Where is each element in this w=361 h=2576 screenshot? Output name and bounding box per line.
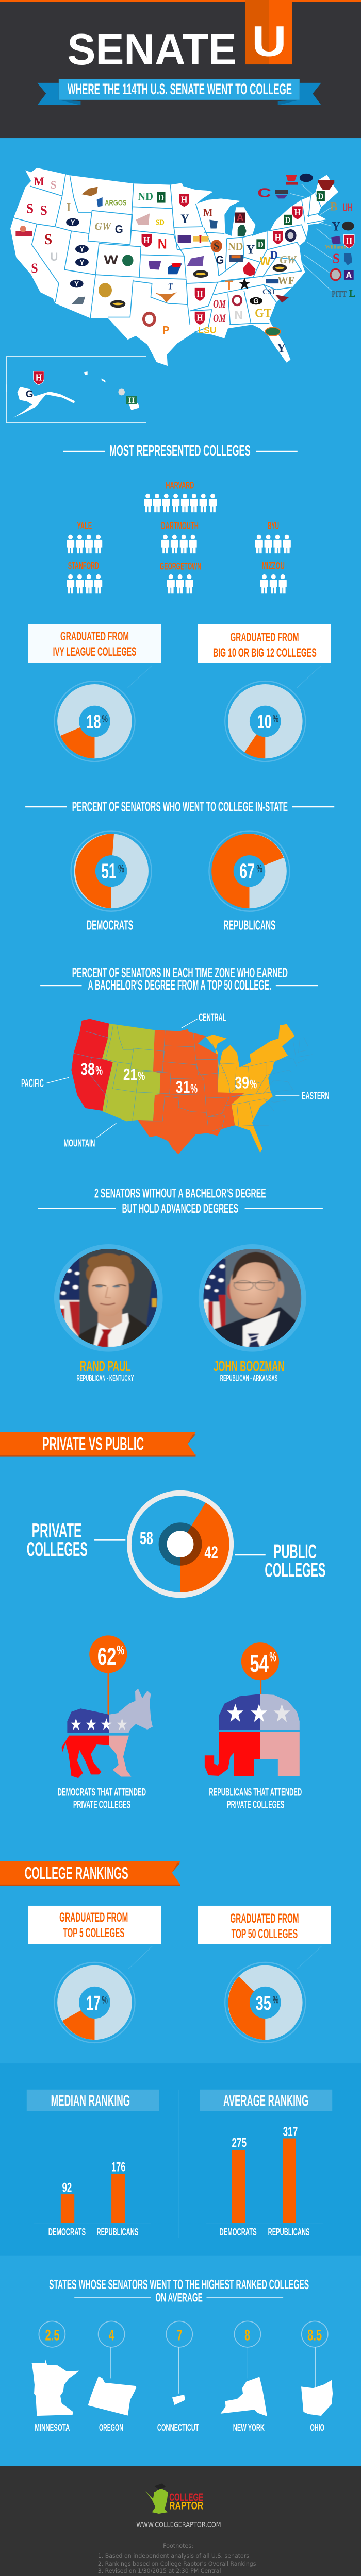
college logos: T (225, 277, 233, 293)
college logos: Y (246, 243, 255, 257)
college logos: H (196, 313, 203, 323)
map: time zones: % (250, 1077, 257, 1091)
donut chart: Democrats 51 percent: 51 (101, 860, 116, 883)
portrait: John Boozman (199, 1244, 306, 1352)
college logos: N (158, 236, 167, 252)
college logos: H (346, 236, 352, 246)
people counts: HARVARD (166, 480, 194, 491)
section: header (0, 0, 361, 392)
label: public colleges: PUBLIC (273, 1540, 317, 1563)
college logos: UH (342, 201, 353, 214)
people counts: MIZZOU (262, 560, 285, 571)
inset: Alaska and Hawaii (7, 357, 146, 392)
donut chart: Republicans 67 percent: % (256, 862, 262, 875)
college logos: OM (213, 297, 226, 310)
college logos: Y (332, 219, 341, 234)
icon: Democratic donkey 62 percent: DEMOCRATS THAT ATTENDED (58, 1786, 146, 1799)
icon: orange U block (245, 0, 292, 64)
labels: time zones: PACIFIC (21, 1077, 44, 1090)
donut chart: 10 percent: % (273, 713, 278, 725)
college logos: G (253, 296, 259, 305)
donut chart: 17 percent: % (102, 1994, 108, 2006)
college logos: WF (277, 274, 294, 287)
map: time zones: 31 (176, 1077, 190, 1096)
ribbon with subtitle (37, 79, 321, 105)
icon: Republican elephant 54 percent: % (269, 1650, 276, 1664)
state: New York (221, 2321, 267, 2433)
state: Connecticut (157, 2321, 199, 2433)
name: John Boozman (214, 1358, 284, 1382)
heading: ON AVERAGE (155, 2291, 203, 2304)
portrait: Rand Paul (54, 1244, 163, 1352)
donut chart: 10 percent (225, 681, 305, 761)
college logos: Williams (325, 245, 346, 250)
labels: time zones: CENTRAL (199, 1012, 226, 1024)
state: Minnesota (32, 2321, 79, 2433)
bar chart: average ranking: DEMOCRATS (219, 2226, 257, 2238)
icon: Republican elephant 54 percent (205, 1642, 302, 1811)
college logos: S (31, 261, 38, 276)
heading (49, 2277, 309, 2304)
college logos: S (26, 201, 34, 216)
state: Oregon: 4 (109, 2327, 114, 2344)
state: Ohio: OHIO (310, 2422, 324, 2433)
state: Minnesota: MINNESOTA (35, 2422, 70, 2433)
college logos: H (143, 235, 150, 245)
icon: Democratic donkey 62 percent (58, 1635, 153, 1811)
college logos: H (196, 289, 203, 299)
icon: Democratic donkey 62 percent: 62 (97, 1643, 116, 1670)
footnotes (98, 2542, 256, 2574)
icon: Republican elephant 54 percent: 54 (250, 1650, 269, 1677)
college logos: T (168, 281, 173, 291)
state: Oregon: OREGON (99, 2422, 123, 2433)
college logos: B (330, 200, 338, 213)
section: most represented colleges (7, 384, 331, 761)
logo: College Raptor: COLLEGE (169, 2490, 203, 2503)
name: Rand Paul (77, 1358, 134, 1382)
zone: Mountain (101, 1024, 160, 1121)
callout: Ivy League (28, 624, 161, 663)
donut chart: Republicans 67 percent: REPUBLICANS (223, 918, 275, 933)
icon: Democratic donkey 62 percent: PRIVATE COLLEGES (73, 1799, 130, 1811)
zone: Central (138, 1029, 244, 1154)
icon: Democratic donkey 62 percent: % (117, 1643, 124, 1657)
college logos (15, 174, 355, 385)
banner (0, 1432, 195, 1457)
map: time zones: % (95, 1064, 103, 1077)
college logos: C (257, 186, 271, 200)
state: New York: NEW YORK (233, 2422, 265, 2433)
people counts: GEORGETOWN (160, 561, 201, 572)
inset frame bottom with Alaska and Hawaii (7, 384, 146, 423)
map: US states with college logos (10, 168, 355, 385)
heading: MOST REPRESENTED COLLEGES (109, 443, 251, 460)
college logos: D (158, 194, 164, 202)
donut chart: Democrats 51 percent (71, 831, 152, 933)
labels: time zones (21, 1012, 329, 1149)
donut chart: Republicans 67 percent (209, 831, 290, 933)
state: Minnesota: 2.5 (45, 2327, 60, 2344)
people counts: STANFORD (68, 560, 99, 571)
section: college rankings (0, 1861, 361, 2246)
section: senators without bachelor's degree: REPUBLICAN - KENTUCKY (77, 1374, 134, 1382)
college logos: ND (228, 240, 243, 253)
footnotes: 2. Rankings based on College Raptor's Overall Rankings (98, 2560, 256, 2567)
college logos: I (67, 200, 71, 214)
college logos: ND (138, 190, 153, 203)
footnotes: 1. Based on independent analysis of all U.S. senators (98, 2553, 249, 2560)
callout: top 5 (28, 1906, 161, 1944)
college logos: W (260, 254, 271, 268)
people counts: DARTMOUTH (161, 520, 199, 532)
bar chart: median ranking (27, 2090, 159, 2238)
heading (38, 1186, 323, 1216)
label: private colleges: PRIVATE (32, 1519, 81, 1541)
college logos: H (275, 232, 281, 242)
state: Ohio (301, 2321, 333, 2433)
college logos: D (270, 248, 278, 261)
donut chart: private vs public (129, 1493, 232, 1595)
bar chart: median ranking: MEDIAN RANKING (51, 2092, 130, 2110)
college logos: H (36, 372, 42, 383)
callout: Ivy League: GRADUATED FROM (60, 630, 129, 643)
college logos: GT (255, 307, 272, 320)
bar chart: average ranking: REPUBLICANS (268, 2226, 309, 2238)
college logos: H (181, 195, 187, 205)
donut chart: 18 percent: % (102, 713, 108, 725)
bar chart: average ranking: 317 (283, 2125, 298, 2139)
people counts (67, 480, 291, 593)
section: senators without bachelor's degree: REPUBLICAN - ARKANSAS (220, 1374, 277, 1382)
callout: Ivy League: IVY LEAGUE COLLEGES (53, 645, 136, 659)
college logos: U (50, 250, 58, 263)
college logos: CSJ (262, 289, 275, 296)
callout: top 5: TOP 5 COLLEGES (63, 1926, 125, 1940)
college logos: SD (156, 219, 165, 227)
bar chart: median ranking: DEMOCRATS (48, 2226, 86, 2238)
banner: PRIVATE VS PUBLIC (42, 1433, 144, 1454)
college logos: L (349, 288, 355, 299)
college logos: PITT (332, 290, 347, 299)
label: private colleges: COLLEGES (27, 1537, 88, 1560)
college logos: P (162, 324, 169, 337)
callout: top 50: TOP 50 COLLEGES (232, 1927, 298, 1941)
title: U: U (252, 17, 286, 65)
college logos: A (237, 212, 243, 224)
bar chart: average ranking (200, 2090, 332, 2238)
logo: College Raptor: RAPTOR (169, 2499, 203, 2512)
section: senators without bachelor's degree: RAND PAUL (80, 1358, 131, 1375)
donut chart: 35 percent: % (273, 1994, 278, 2006)
donut chart: 10 percent: 10 (257, 710, 272, 733)
inset frame bottom with Alaska and Hawaii: H (128, 396, 135, 405)
college logos: M (34, 175, 44, 188)
donut chart: 18 percent: 18 (86, 710, 101, 733)
college logos: S (44, 231, 52, 248)
map: time zones: 39 (235, 1073, 249, 1092)
logo: College Raptor (145, 2483, 203, 2514)
map: time zones: % (138, 1069, 145, 1083)
footnotes: Footnotes: (163, 2542, 193, 2549)
bar chart: median ranking: REPUBLICANS (97, 2226, 138, 2238)
college logos: Y (74, 279, 79, 288)
labels: time zones: EASTERN (302, 1091, 329, 1102)
people counts: BYU (268, 520, 279, 532)
map: time zones: % (190, 1082, 198, 1095)
title: SENATE: SENATE (67, 25, 237, 74)
donut chart: private vs public: 42 (204, 1543, 218, 1563)
donut chart: 35 percent (225, 1962, 305, 2043)
banner: COLLEGE RANKINGS (25, 1863, 128, 1883)
college logos: GW (280, 254, 297, 266)
bar chart: average ranking: 275 (232, 2136, 247, 2150)
callout: top 50: GRADUATED FROM (230, 1911, 299, 1926)
college logos: S (214, 241, 219, 252)
college logos: D (318, 192, 323, 201)
college logos: G (216, 253, 224, 266)
banner (0, 1861, 180, 1886)
state: Connecticut: 7 (177, 2327, 183, 2344)
section: in-state and time zones (21, 800, 334, 1154)
section: senators without bachelor's degree (38, 1186, 323, 1382)
zone: Eastern (206, 1024, 294, 1153)
heading: time zones (40, 965, 318, 993)
state: Oregon (88, 2321, 136, 2433)
college logos: I (198, 232, 203, 246)
college logos: OM (213, 312, 226, 325)
college logos: W (104, 252, 118, 266)
label: public colleges (235, 1540, 325, 1581)
map: time zones: 38 (80, 1059, 95, 1079)
label: public colleges: COLLEGES (265, 1558, 325, 1581)
college logos: S (51, 178, 56, 191)
website: WWW.COLLEGERAPTOR.COM (136, 2521, 221, 2529)
people counts: YALE (77, 520, 92, 532)
state: Ohio: 8.5 (307, 2327, 322, 2344)
icon: Republican elephant 54 percent: REPUBLICANS THAT ATTENDED (209, 1786, 302, 1799)
college logos: D (258, 240, 264, 249)
college logos: ARGOS (105, 198, 127, 207)
college logos: Y (277, 341, 286, 355)
donut chart: private vs public: 58 (140, 1529, 153, 1548)
zone: Pacific (71, 1019, 113, 1111)
donut chart: Democrats 51 percent: DEMOCRATS (87, 918, 133, 933)
footnotes: 3. Revised on 1/30/2015 at 2:30 PM Central (98, 2567, 221, 2574)
college logos: Y (180, 212, 189, 226)
college logos: M (203, 207, 212, 219)
college logos: S (40, 202, 47, 218)
college logos: D (285, 216, 291, 225)
callout: top 50 (198, 1906, 331, 1944)
donut chart: 17 percent: 17 (86, 1992, 101, 2015)
college logos: Y (79, 258, 85, 266)
donut chart: 17 percent (54, 1962, 135, 2043)
college logos: LSU (198, 326, 217, 335)
college logos: S (333, 250, 340, 266)
state: New York: 8 (244, 2327, 250, 2344)
map: time zones (71, 1019, 313, 1154)
college logos: N (234, 308, 243, 322)
inset frame bottom with Alaska and Hawaii: G (26, 389, 33, 400)
college logos: A (346, 269, 352, 280)
icon: Republican elephant 54 percent: PRIVATE COLLEGES (227, 1799, 284, 1811)
map: time zones: 21 (123, 1065, 137, 1084)
callout: Big 10 or Big 12: GRADUATED FROM (230, 631, 299, 645)
college logos: GW (95, 221, 112, 232)
callout: Big 10 or Big 12 (198, 624, 331, 663)
college logos: G (115, 223, 123, 236)
state: Connecticut: CONNECTICUT (157, 2422, 199, 2433)
donut chart: 35 percent: 35 (256, 1992, 271, 2014)
bar chart: median ranking: 92 (62, 2181, 72, 2195)
label: private colleges (27, 1519, 125, 1560)
donut chart: Democrats 51 percent: % (118, 862, 124, 875)
bar chart: median ranking: 176 (111, 2160, 125, 2175)
donut chart: 18 percent (54, 681, 135, 761)
donut chart: Republicans 67 percent: 67 (239, 860, 255, 883)
section: private vs public (0, 1432, 325, 1811)
college logos: H (294, 207, 301, 217)
college logos: Y (79, 245, 85, 253)
footer (0, 2466, 361, 2576)
callout: top 5: GRADUATED FROM (59, 1910, 128, 1925)
labels: time zones: MOUNTAIN (64, 1138, 95, 1149)
section: top states and footer (0, 2246, 361, 2576)
college logos: Y (71, 218, 75, 227)
